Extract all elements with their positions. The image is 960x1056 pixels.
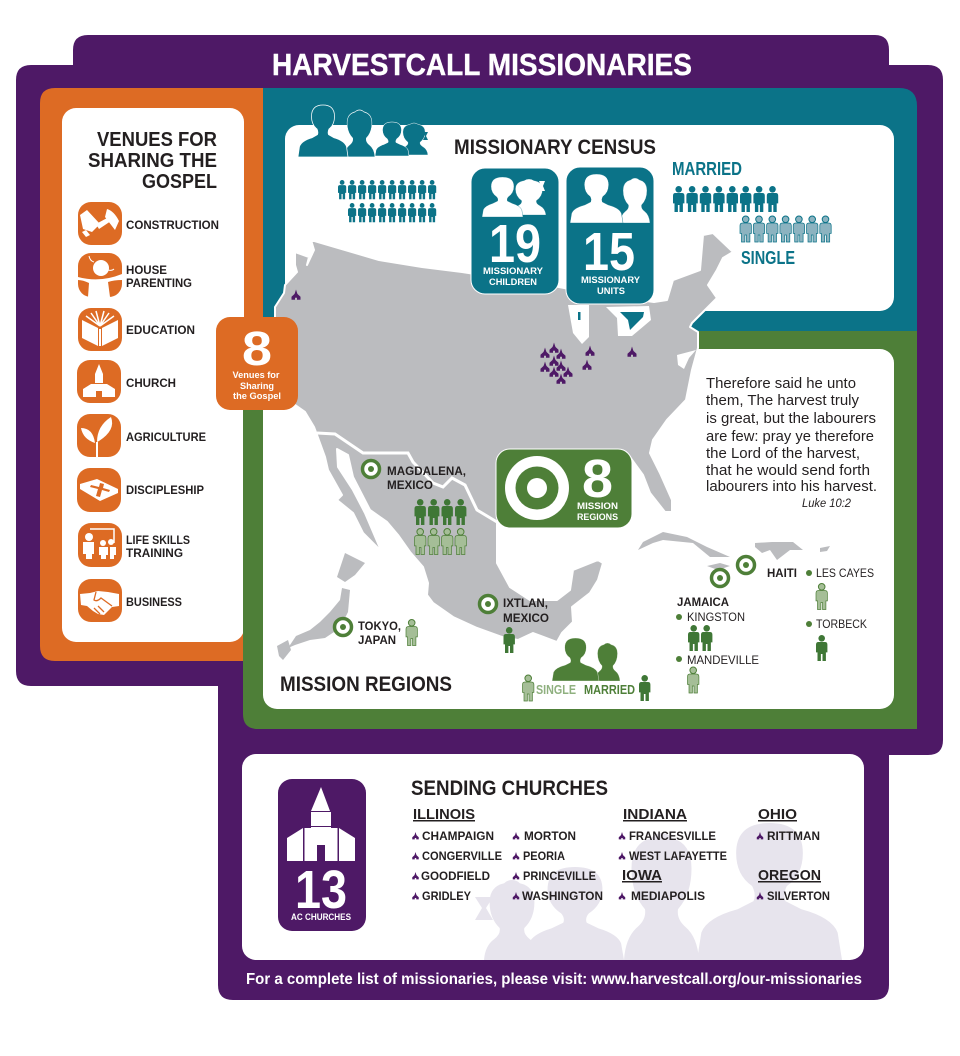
background silhouettes — [475, 823, 842, 960]
bible quote: are few: pray ye therefore — [706, 428, 874, 445]
state: oregon: OREGON — [758, 867, 821, 884]
panel: missionary census background — [263, 88, 917, 332]
panel: sending churches — [242, 754, 864, 960]
pictogram: missionary children — [338, 180, 436, 222]
venues heading: VENUES FOR — [97, 129, 218, 151]
venues heading: SHARING THE — [88, 150, 217, 172]
badge: 19 missionary children: CHILDREN — [489, 277, 537, 288]
state: illinois: WASHINGTON — [522, 889, 603, 903]
census heading: MISSIONARY CENSUS — [454, 136, 656, 159]
state: iowa: IOWA — [622, 867, 662, 884]
badge: 8 mission regions: REGIONS — [577, 512, 618, 523]
mexico border line — [317, 433, 497, 522]
badge: 8 venues — [216, 317, 298, 410]
state: oregon — [757, 867, 830, 903]
region: tokyo, japan: JAPAN — [358, 633, 396, 647]
legend: single and married: MARRIED — [584, 682, 635, 697]
state: illinois: ILLINOIS — [413, 806, 475, 823]
region: haiti: TORBECK — [816, 617, 867, 631]
icon: church — [77, 360, 121, 403]
panel: mission regions background — [243, 331, 917, 729]
badge: 15 missionary units — [566, 167, 654, 304]
venues heading: GOSPEL — [142, 171, 217, 193]
venue label: house parenting — [126, 263, 192, 290]
region: ixtlan, mexico — [480, 596, 549, 653]
sending churches heading: SENDING CHURCHES — [411, 777, 608, 800]
badge: 8 venues: Venues for — [232, 370, 280, 381]
title: HARVESTCALL MISSIONARIES — [272, 47, 692, 82]
state: illinois: MORTON — [524, 829, 576, 843]
venue label: discipleship: DISCIPLESHIP — [126, 483, 204, 497]
badge: 19 missionary children — [471, 168, 559, 294]
pictogram: single missionaries — [740, 216, 831, 242]
badge: 13 ac churches: AC CHURCHES — [291, 912, 351, 923]
state: illinois: PEORIA — [523, 849, 565, 863]
census silhouettes — [298, 105, 428, 157]
icon: construction — [78, 202, 122, 245]
state: ohio — [757, 806, 820, 843]
badge: 8 mission regions: MISSION — [577, 501, 618, 512]
region: ixtlan, mexico: MEXICO — [503, 611, 549, 625]
footer link: For a complete list of missionaries, please visit: www.harvestcall.org/our-missionaries — [246, 971, 862, 988]
badge: 8 venues: the Gospel — [233, 391, 281, 402]
badge: 19 missionary children: MISSIONARY — [483, 266, 544, 277]
mission regions heading: MISSION REGIONS — [280, 673, 452, 696]
married label: MARRIED — [672, 159, 742, 179]
venue label: life skills training: LIFE SKILLS — [126, 533, 190, 547]
regions white card — [263, 349, 894, 709]
bible quote: Luke 10:2 — [802, 496, 851, 510]
venue label: house parenting: PARENTING — [126, 276, 192, 290]
icon: life skills training — [78, 523, 122, 567]
state: ohio: RITTMAN — [767, 829, 820, 843]
bible quote: that he would send forth — [706, 462, 870, 479]
state: oregon: SILVERTON — [767, 889, 830, 903]
state: illinois: GRIDLEY — [422, 889, 471, 903]
state: indiana: WEST LAFAYETTE — [629, 849, 727, 863]
region: ixtlan, mexico: IXTLAN, — [503, 596, 548, 610]
panel: venues for sharing the gospel — [40, 88, 263, 661]
pictogram: married missionaries — [673, 186, 778, 212]
badge: 19 missionary children: 19 — [489, 214, 541, 274]
region: haiti — [738, 556, 874, 661]
badge: 8 venues: Sharing — [240, 381, 274, 392]
icon: education — [78, 308, 122, 351]
bible quote: the Lord of the harvest, — [706, 445, 860, 462]
bible quote — [706, 375, 877, 510]
icon: house parenting — [78, 253, 122, 297]
state: illinois: GOODFIELD — [421, 869, 490, 883]
venue label: education: EDUCATION — [126, 323, 195, 337]
region: jamaica — [676, 570, 759, 693]
census white card — [285, 125, 894, 311]
region: jamaica: MANDEVILLE — [687, 653, 759, 667]
state: illinois — [412, 806, 603, 903]
venues heading — [88, 129, 218, 193]
region: tokyo, japan: TOKYO, — [358, 619, 401, 633]
icon: discipleship — [77, 468, 121, 512]
badge: 15 missionary units: 15 — [583, 222, 635, 282]
bible quote: Therefore said he unto — [706, 375, 856, 392]
region: haiti: HAITI — [767, 566, 797, 580]
legend: single and married: SINGLE — [536, 682, 576, 697]
icon: agriculture — [77, 414, 121, 457]
venue label: life skills training: TRAINING — [126, 546, 183, 560]
region: magdalena, mexico: MEXICO — [387, 478, 433, 492]
bible quote: them, The harvest truly — [706, 392, 859, 409]
single label: SINGLE — [741, 248, 795, 268]
badge: 13 ac churches — [278, 779, 366, 931]
venue label: house parenting: HOUSE — [126, 263, 167, 277]
badge: 15 missionary units: MISSIONARY — [581, 275, 641, 286]
legend: single and married — [522, 638, 650, 701]
bible quote: labourers into his harvest. — [706, 478, 877, 495]
state: illinois: CONGERVILLE — [422, 849, 502, 863]
state: illinois: PRINCEVILLE — [523, 869, 596, 883]
venue label: agriculture: AGRICULTURE — [126, 430, 206, 444]
badge: 13 ac churches: 13 — [295, 860, 347, 920]
venue label: business: BUSINESS — [126, 595, 182, 609]
region: jamaica: JAMAICA — [677, 595, 729, 609]
region: haiti: LES CAYES — [816, 566, 874, 580]
icon: business handshake — [78, 579, 122, 622]
state: ohio: OHIO — [758, 806, 797, 823]
badge: 8 venues: 8 — [242, 323, 272, 376]
region: magdalena, mexico: MAGDALENA, — [387, 464, 466, 478]
state: indiana: INDIANA — [623, 806, 687, 823]
bible quote: is great, but the labourers — [706, 410, 876, 427]
venue label: life skills training — [126, 533, 190, 560]
map: north america, mexico, caribbean and japan — [275, 233, 830, 660]
badge: 8 mission regions — [496, 449, 632, 528]
region: tokyo, japan — [334, 618, 417, 647]
region: magdalena, mexico — [362, 460, 466, 554]
state: illinois: CHAMPAIGN — [422, 829, 494, 843]
region: jamaica: KINGSTON — [687, 610, 745, 624]
state: indiana: FRANCESVILLE — [629, 829, 716, 843]
venue label: construction: CONSTRUCTION — [126, 218, 219, 232]
great lakes — [568, 305, 696, 369]
badge: 15 missionary units: UNITS — [597, 286, 625, 297]
badge: 8 mission regions: 8 — [582, 449, 613, 509]
state: iowa — [619, 867, 705, 903]
state: iowa: MEDIAPOLIS — [631, 889, 705, 903]
state: indiana — [619, 806, 727, 863]
venue label: church: CHURCH — [126, 376, 176, 390]
church markers on map — [292, 290, 636, 384]
